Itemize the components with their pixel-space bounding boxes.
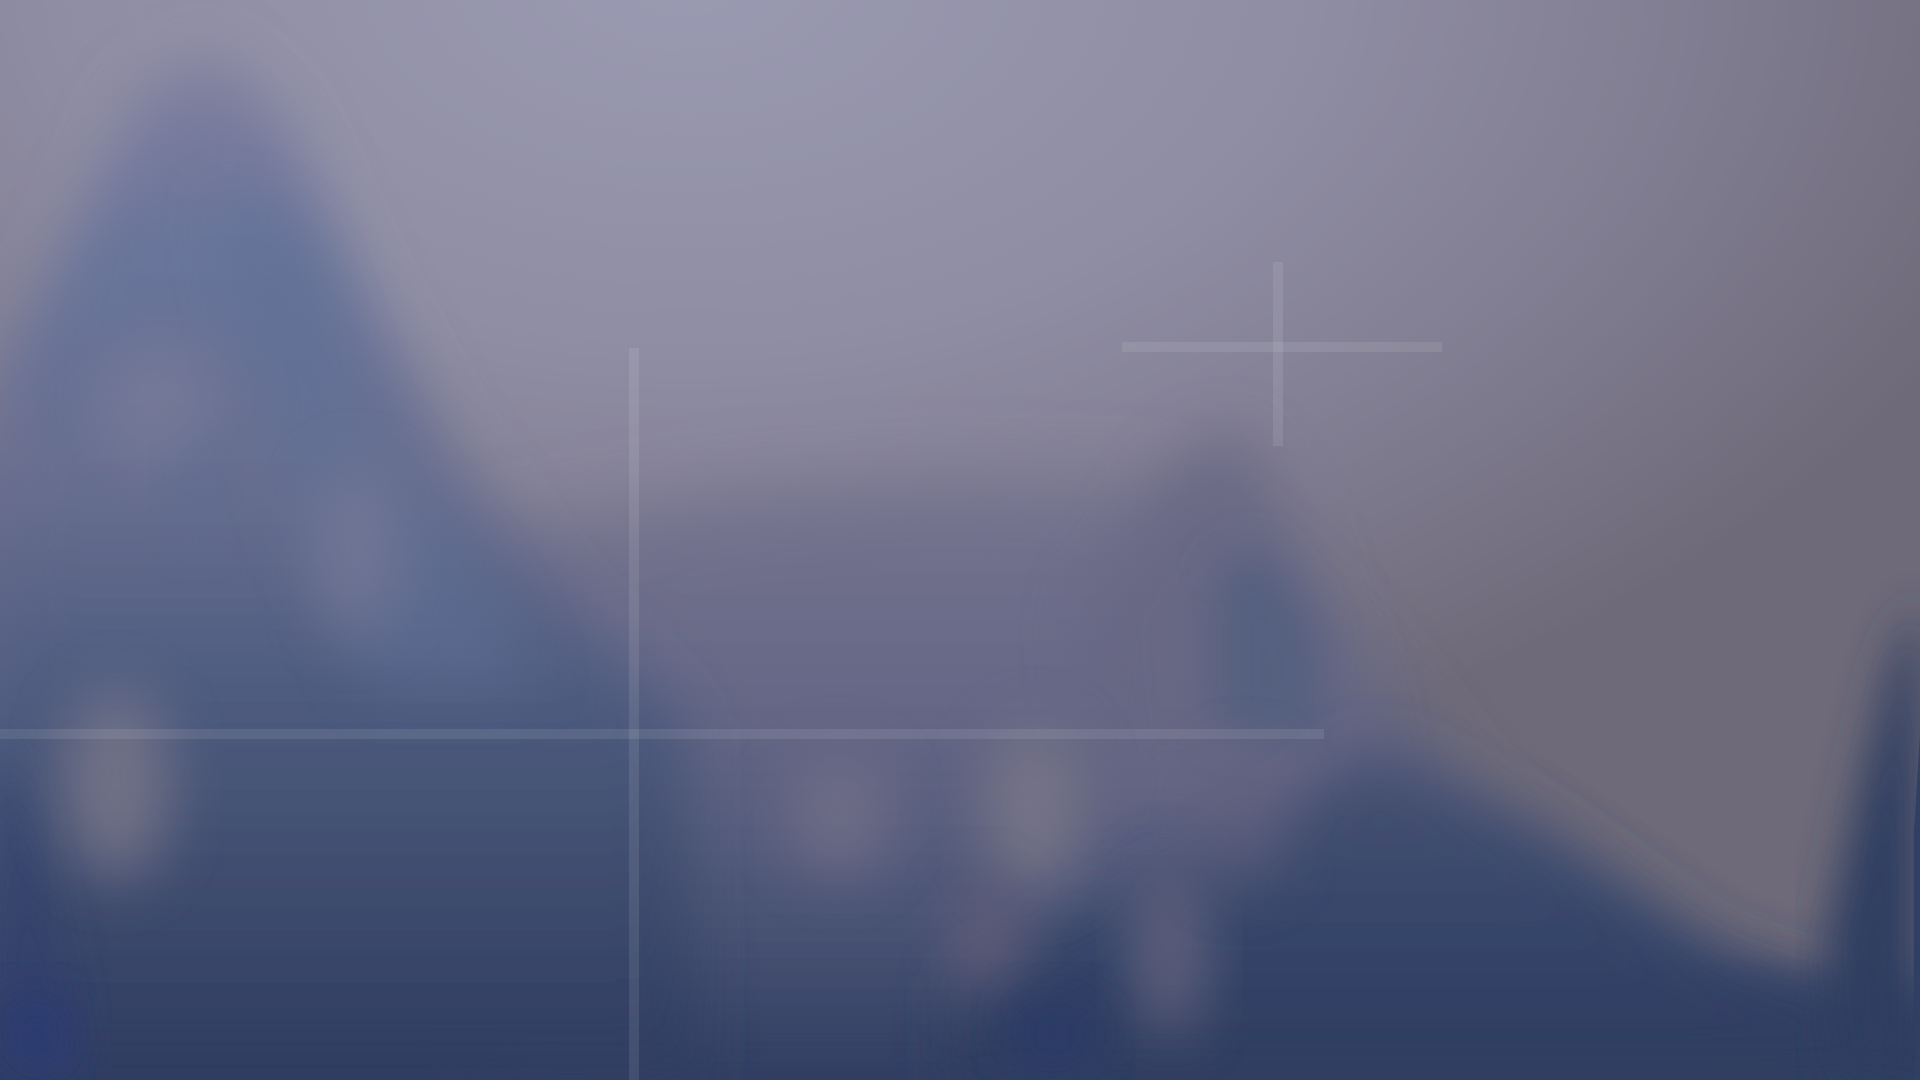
pale patch lower centre — [947, 884, 1025, 1002]
left mountain pale face right — [311, 465, 399, 637]
deep blue bottom left — [0, 989, 73, 1080]
pale patch right — [1196, 753, 1289, 888]
left mountain — [0, 55, 698, 1080]
far right dark slope — [1824, 600, 1920, 1080]
bottom underlay — [0, 955, 1920, 1080]
left mountain dark blot — [167, 410, 225, 545]
small cross: vertical line — [1273, 262, 1283, 446]
lower left dark column — [0, 747, 86, 1080]
pale patch centre — [787, 753, 890, 876]
pale patch left — [62, 688, 170, 879]
pale patch right of centre — [983, 725, 1086, 891]
left mountain pale face left — [98, 343, 220, 465]
middle valley band — [490, 484, 1920, 1080]
second peak dark face — [1212, 545, 1329, 747]
second peak — [1078, 429, 1384, 808]
small cross: horizontal line — [1122, 342, 1442, 352]
pale patch lower — [1133, 861, 1206, 1037]
deep blue bottom — [1002, 989, 1104, 1080]
left edge underlay — [0, 355, 49, 1080]
large cross: vertical line — [629, 348, 639, 1080]
right ground — [955, 747, 1920, 1080]
left mountain blue ridge — [214, 196, 539, 686]
large cross: horizontal line — [0, 729, 1324, 739]
right edge underlay — [1914, 735, 1920, 1080]
